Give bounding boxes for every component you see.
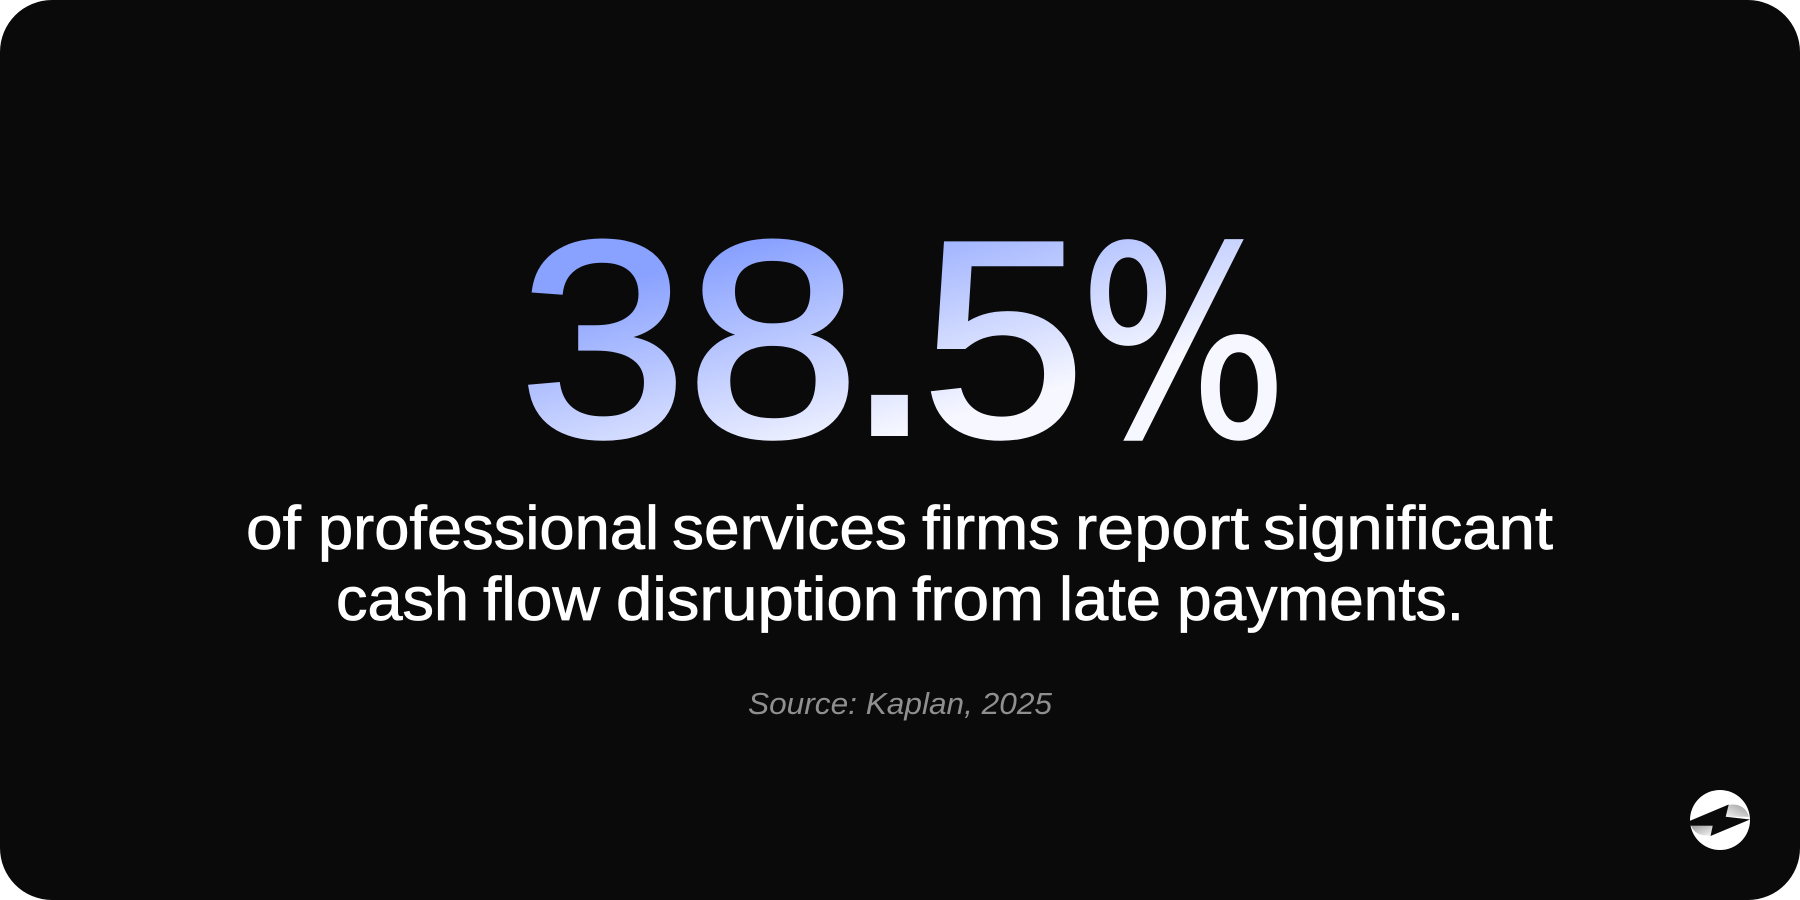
description text: disruption: [616, 565, 899, 633]
description text: cash: [336, 565, 469, 633]
headline statistic: [519, 87, 1288, 518]
description text: report: [1075, 494, 1249, 562]
description text: services: [672, 494, 907, 562]
description text: flow: [483, 565, 601, 633]
description text: payments.: [1177, 565, 1464, 633]
description text: significant: [1263, 494, 1553, 562]
description text: professional: [318, 494, 659, 562]
headline statistic: %: [1079, 192, 1288, 499]
icon: lightning logo: [1690, 790, 1750, 850]
description text: from: [912, 565, 1044, 633]
headline statistic: 3: [519, 184, 687, 496]
headline statistic: .: [836, 87, 943, 518]
headline statistic: 8: [686, 184, 860, 496]
description text: [246, 494, 1553, 633]
description text: of: [246, 494, 302, 562]
source citation: Source: Kaplan, 2025: [748, 686, 1053, 721]
headline statistic: 5: [922, 184, 1086, 496]
description text: late: [1059, 565, 1161, 633]
description text: firms: [922, 494, 1060, 562]
